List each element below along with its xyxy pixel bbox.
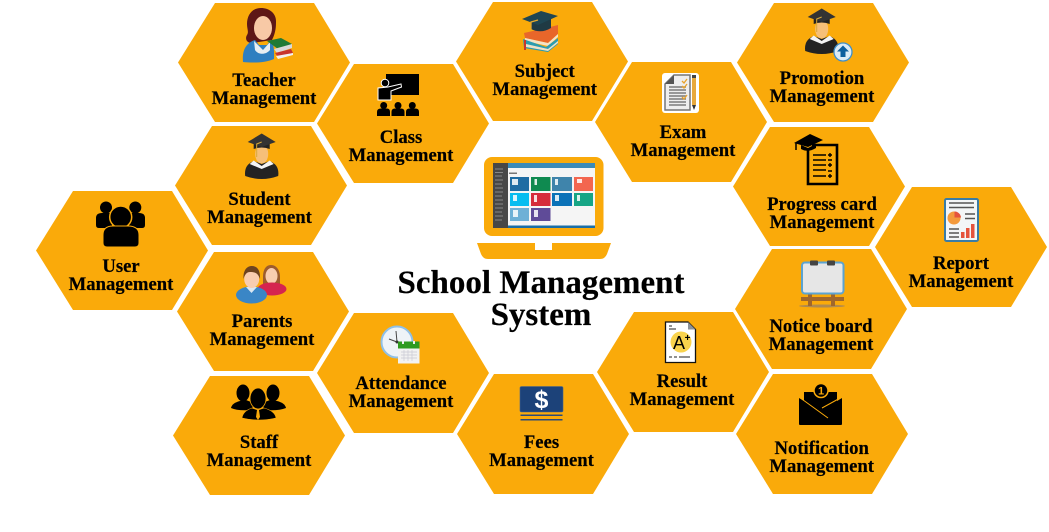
label: teacher management: Teacher (232, 70, 296, 91)
icon: envelope with badge (799, 384, 842, 425)
label: exam management: Exam (660, 122, 706, 143)
panel: notice board management (735, 249, 907, 369)
label: notice board management: Management (769, 334, 874, 355)
icon: central laptop with dashboard (477, 157, 611, 259)
dashboard screen (493, 163, 595, 228)
icon: progress card with cap (794, 134, 837, 184)
label: result management: Management (630, 389, 735, 410)
icon: teacher with books (243, 8, 293, 63)
icon: dollar bill stack (520, 386, 563, 420)
icon: result sheet A+: A (673, 333, 685, 353)
icon: notice board (799, 260, 845, 308)
panel: subject management (456, 2, 628, 121)
label: fees management: Fees (524, 432, 559, 453)
panel: promotion management (737, 3, 909, 122)
panel: class management (317, 64, 489, 183)
label: attendance management: Management (349, 391, 454, 412)
panel: staff management (173, 376, 345, 495)
label: progress card management: Progress card (767, 194, 877, 215)
panel: user management (36, 191, 208, 310)
label: report management: Report (933, 253, 989, 274)
label: student management: Management (207, 207, 313, 228)
icon: staff group (231, 384, 286, 420)
icon: classroom (377, 74, 419, 116)
icon: result sheet A+: + (685, 333, 691, 344)
panel: progress card management (733, 127, 905, 246)
label: promotion management: Promotion (780, 68, 864, 89)
title: System (491, 297, 591, 333)
label: notification management: Management (769, 456, 875, 477)
label: promotion management: Management (770, 86, 875, 107)
laptop body (484, 157, 604, 236)
icon: graduate student (245, 134, 278, 179)
label: class management: Management (349, 145, 454, 166)
label: report management: Management (909, 271, 1014, 292)
label: student management: Student (228, 189, 291, 210)
label: parents management: Management (210, 329, 315, 350)
icon: user group (96, 202, 145, 247)
panel: parents management (177, 252, 349, 371)
icon: report document (945, 199, 978, 241)
label: notification management: Notification (775, 438, 869, 459)
icon: result sheet A+ (666, 322, 696, 362)
label: class management: Class (380, 127, 422, 148)
icon: clock and calendar (382, 326, 420, 364)
label: user management: User (102, 256, 140, 277)
panel: fees management (457, 374, 629, 494)
panel: teacher management (178, 3, 350, 122)
label: progress card management: Management (770, 212, 875, 233)
panel: exam management (595, 62, 767, 182)
icon: parents (236, 265, 286, 304)
label: result management: Result (657, 371, 707, 392)
label: teacher management: Management (212, 88, 317, 109)
label: subject management: Management (492, 79, 598, 100)
label: notice board management: Notice board (769, 316, 873, 337)
icon: dollar bill stack: $ (535, 386, 549, 414)
panel: notification management (736, 374, 908, 494)
laptop base (477, 243, 611, 259)
label: fees management: Management (489, 450, 595, 471)
title: School Management (398, 265, 684, 301)
label: parents management: Parents (232, 311, 292, 332)
label: attendance management: Attendance (355, 373, 447, 394)
panel: attendance management (317, 313, 489, 433)
icon: exam paper and pen (662, 73, 699, 113)
icon: cap on books (522, 11, 558, 52)
label: exam management: Management (631, 140, 736, 161)
label: user management: Management (69, 274, 174, 295)
label: staff management: Staff (240, 432, 278, 453)
panel: student management (175, 126, 347, 245)
panel: report management (875, 187, 1047, 307)
label: subject management: Subject (515, 61, 575, 82)
label: staff management: Management (207, 450, 312, 471)
icon: envelope with badge: 1 (818, 386, 824, 398)
icon: graduate with upload badge (805, 8, 852, 61)
panel: result management (597, 312, 769, 432)
